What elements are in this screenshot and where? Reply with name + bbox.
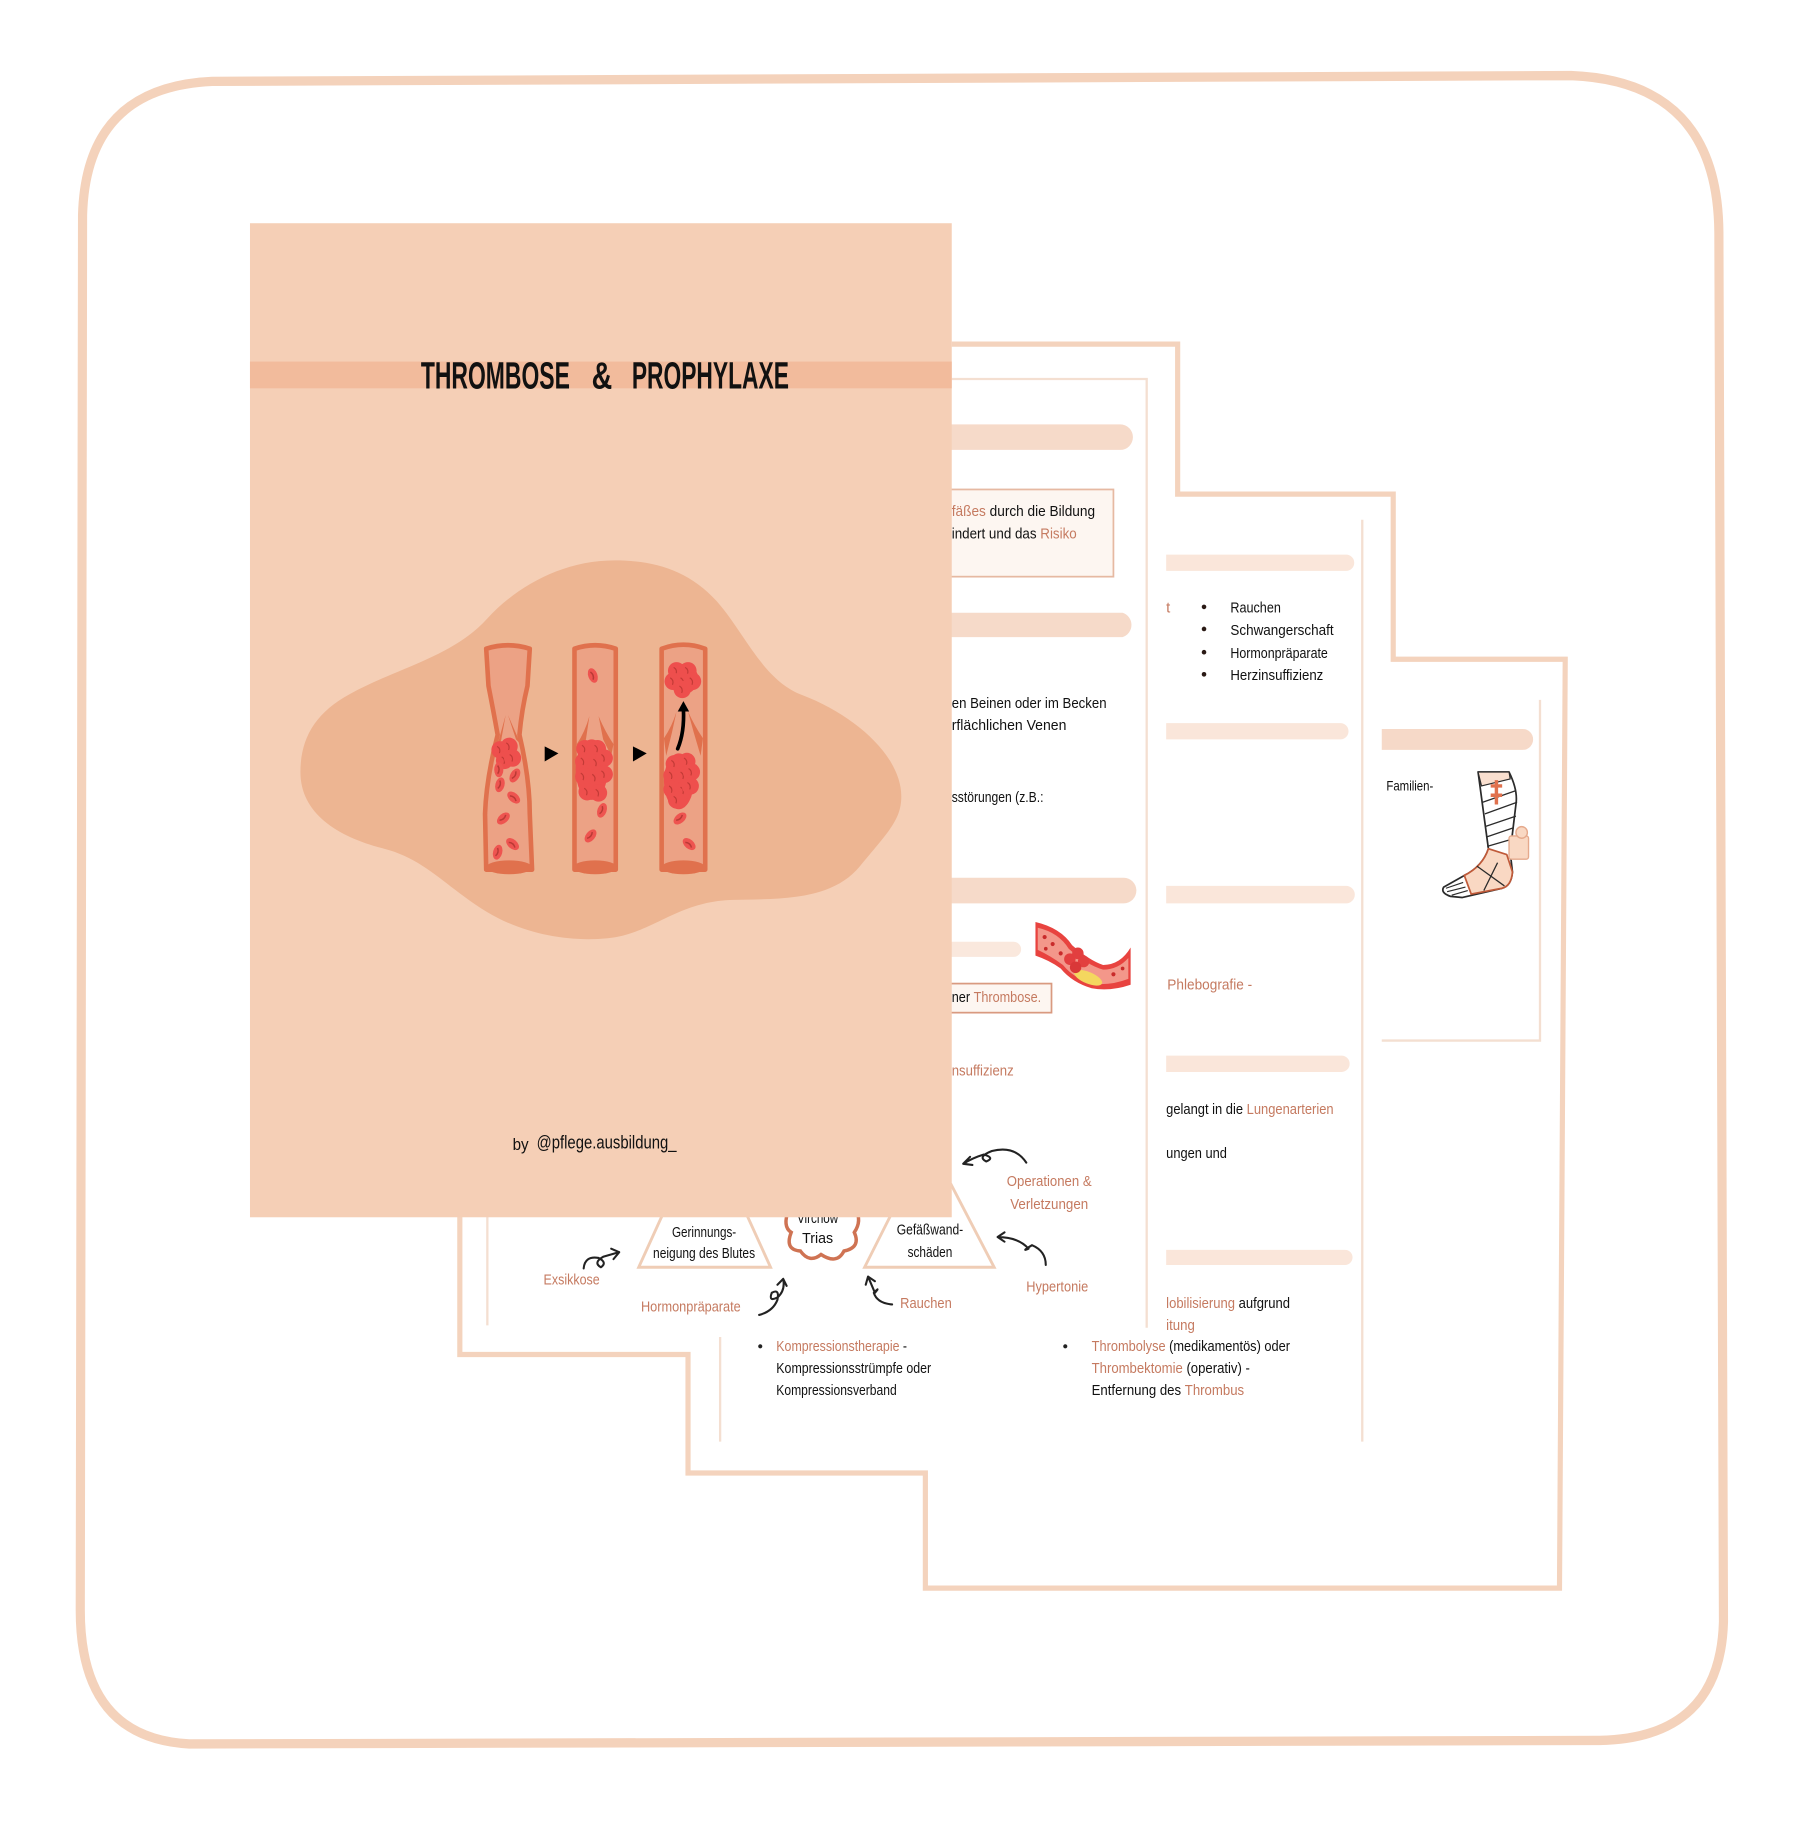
definition box: fäßes durch die Bildung bbox=[952, 503, 1095, 520]
text: Lungenembolie: gelangt in die Lungenarterien bbox=[1166, 1101, 1334, 1118]
text: localisation: sstörungen (z.B.: bbox=[952, 789, 1043, 806]
list: Kompressionstherapie: Kompressionsstrümpfe oder bbox=[776, 1360, 931, 1377]
list: Thrombolyse bbox=[1063, 1338, 1290, 1399]
bandage roll bbox=[1509, 827, 1529, 859]
label: Insuffizienz: nsuffizienz bbox=[952, 1062, 1014, 1079]
list: risk factors bbox=[1166, 600, 1334, 684]
labels: risk factors: Hormonpräparate bbox=[641, 1298, 741, 1315]
text: Lungenembolie: ungen und bbox=[1166, 1145, 1227, 1162]
title band bbox=[250, 362, 952, 388]
arrow: stage 1 to 2 bbox=[545, 746, 558, 762]
panel: page 3 bbox=[1382, 700, 1540, 1041]
labels: risk factors bbox=[544, 1173, 1092, 1315]
list: Kompressionstherapie bbox=[758, 1338, 931, 1399]
list: risk factors: Schwangerschaft bbox=[1230, 622, 1334, 639]
author credit: @pflege.ausbildung_ bbox=[537, 1132, 677, 1154]
labels: risk factors: Operationen & bbox=[1007, 1173, 1092, 1190]
text: Lungenembolie bbox=[1166, 1101, 1334, 1162]
definition box: indert und das Risiko bbox=[952, 525, 1077, 542]
title: & bbox=[592, 355, 612, 397]
triangle: Gerinnungsneigung: Gerinnungs- bbox=[672, 1224, 736, 1241]
text: localisation bbox=[952, 695, 1107, 806]
labels: risk factors: Rauchen bbox=[900, 1295, 952, 1312]
callout: Thrombose: ner Thrombose. bbox=[952, 989, 1041, 1006]
definition box bbox=[940, 489, 1113, 577]
arrows: risk factors bbox=[584, 1150, 1046, 1315]
background blob bbox=[300, 560, 901, 939]
list: risk factors: t bbox=[1166, 600, 1171, 617]
heading pill page 3 bbox=[1382, 729, 1533, 750]
list: Kompressionstherapie: Kompressionstherapie - bbox=[776, 1338, 907, 1355]
heading pills page 2 bbox=[1166, 555, 1355, 1265]
text: Phlebografie: Phlebografie - bbox=[1167, 976, 1252, 993]
title bbox=[421, 355, 789, 397]
triangle: Gerinnungsneigung bbox=[639, 1209, 771, 1267]
labels: risk factors: Exsikkose bbox=[544, 1272, 600, 1289]
panel: page 1 bbox=[487, 379, 1147, 1328]
text: Immobilisierung: lobilisierung aufgrund bbox=[1166, 1295, 1290, 1312]
icon: blood vessel with plaque and clot bbox=[1035, 922, 1131, 989]
author credit bbox=[513, 1132, 677, 1154]
icon: bandaged foot bbox=[1443, 772, 1529, 898]
triangle: Gefaesswandschaeden: schäden bbox=[908, 1244, 952, 1261]
list: risk factors: Rauchen bbox=[1230, 600, 1281, 617]
white mask: page 2 over page 1 bbox=[734, 1335, 1147, 1465]
arrow: embolus moving up bbox=[678, 701, 689, 749]
text: localisation: rflächlichen Venen bbox=[952, 717, 1066, 734]
title: PROPHYLAXE bbox=[632, 355, 789, 397]
text: Immobilisierung: itung bbox=[1166, 1317, 1195, 1334]
triangle: Gefaesswandschaeden bbox=[865, 1184, 994, 1267]
list: Thrombolyse: Thrombolyse (medikamentös) oder bbox=[1092, 1338, 1290, 1355]
panel: cover page bbox=[250, 223, 952, 1217]
vein stage 3 bbox=[662, 645, 705, 874]
list: risk factors: Hormonpräparate bbox=[1230, 645, 1328, 662]
panel: page 2 bbox=[720, 520, 1362, 1442]
triangle: Gerinnungsneigung: neigung des Blutes bbox=[653, 1245, 755, 1262]
diagram: Virchow Trias bbox=[544, 1150, 1092, 1315]
triangle: Gefaesswandschaeden: Gefäßwand- bbox=[897, 1222, 963, 1239]
arrow: stage 2 to 3 bbox=[633, 746, 647, 762]
text: Familien: Familien- bbox=[1386, 777, 1433, 794]
labels: risk factors: Verletzungen bbox=[1010, 1196, 1088, 1213]
list: risk factors: Herzinsuffizienz bbox=[1230, 667, 1323, 684]
title: THROMBOSE bbox=[421, 355, 570, 397]
list: Thrombolyse: Thrombektomie (operativ) - bbox=[1092, 1360, 1250, 1377]
text: Immobilisierung bbox=[1166, 1295, 1290, 1334]
heading pills page 1 bbox=[940, 424, 1136, 957]
vein stage 1 bbox=[485, 645, 532, 874]
list: Thrombolyse: Entfernung des Thrombus bbox=[1092, 1382, 1244, 1399]
list: Kompressionstherapie: Kompressionsverband bbox=[776, 1382, 897, 1399]
labels: risk factors: Hypertonie bbox=[1026, 1279, 1088, 1296]
cloud: Virchow Trias: Trias bbox=[802, 1230, 833, 1247]
callout: Thrombose bbox=[940, 984, 1052, 1013]
cloud: Virchow Trias: Virchow bbox=[797, 1210, 838, 1227]
vein stage 2 bbox=[573, 645, 617, 874]
stepped page stack outline bbox=[460, 344, 1565, 1588]
cloud: Virchow Trias bbox=[786, 1209, 859, 1259]
text: localisation: en Beinen oder im Becken bbox=[952, 695, 1107, 712]
illustration: thrombosis stages bbox=[485, 645, 705, 874]
author credit: by bbox=[513, 1136, 529, 1154]
